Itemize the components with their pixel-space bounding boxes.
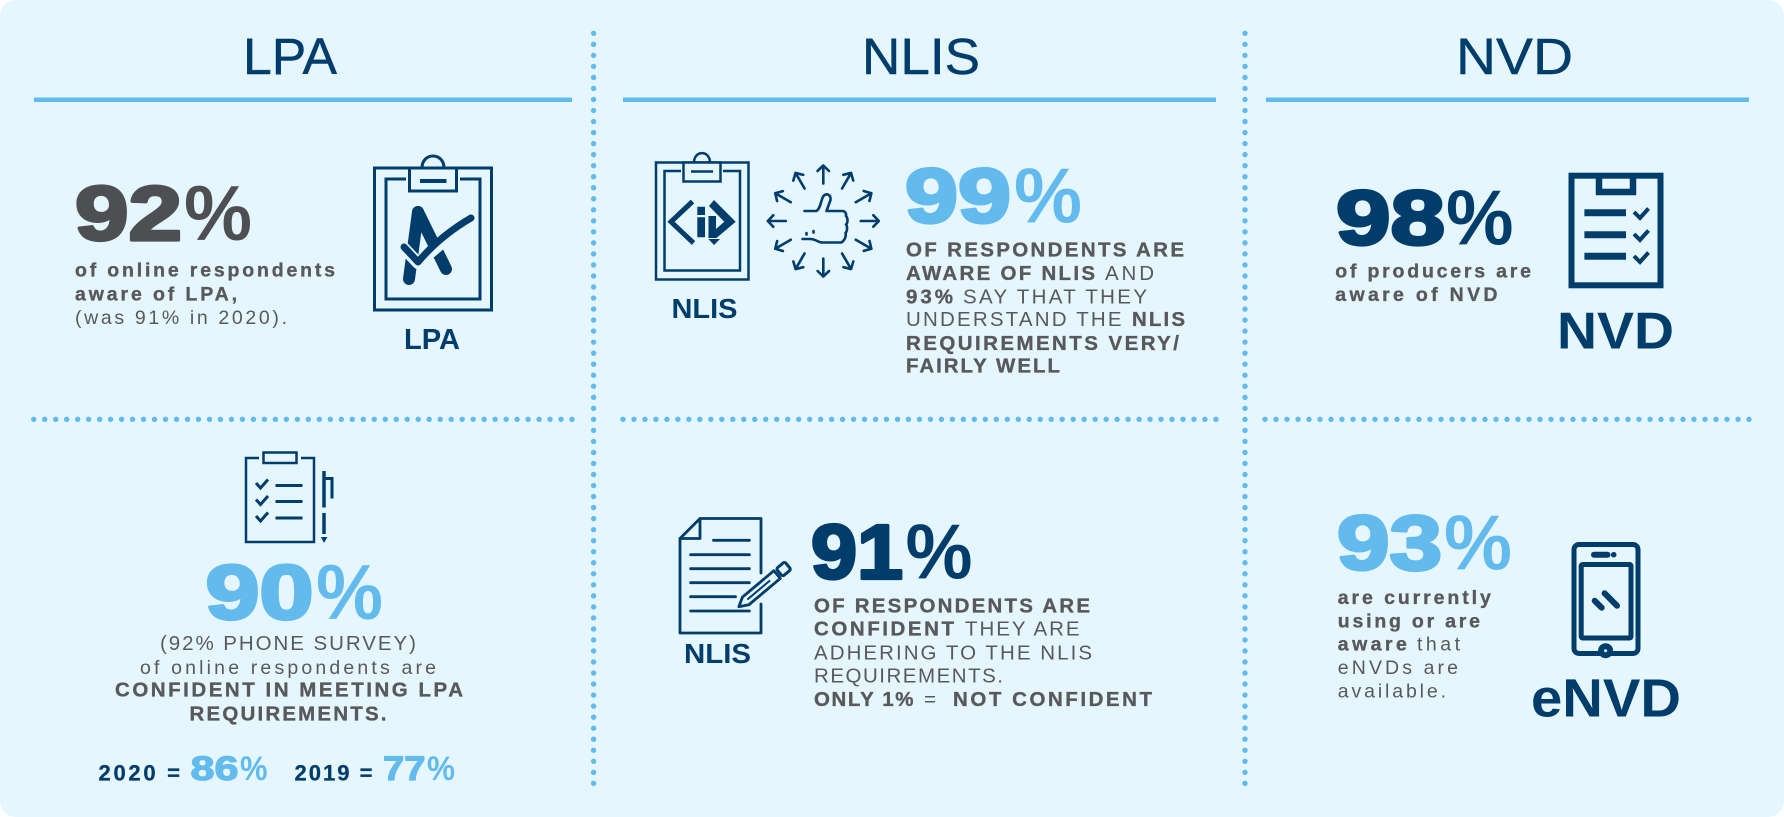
stat: 92%: 92 (75, 171, 182, 257)
panel: NVD column (1266, 28, 1749, 729)
text block: awareness and understanding of NLIS: AWARE OF NLIS (906, 262, 1095, 285)
comparison: 2020 equals 86%: 86 (190, 750, 238, 788)
icon: thumbs up with radiating arrows (768, 166, 879, 276)
icon label: LPA: LPA (404, 324, 460, 356)
text block: awareness and understanding of NLIS: OF RESPONDENTS ARE (906, 239, 1184, 262)
text block: confidence in meeting LPA requirements: (92% PHONE SURVEY) (160, 632, 416, 655)
icon: NLIS clipboard with ID mark (656, 153, 748, 280)
icon label: NLIS document: NLIS (684, 638, 751, 669)
text block: awareness and understanding of NLIS (906, 239, 1185, 378)
text block: confidence in meeting LPA requirements: CONFIDENT IN MEETING LPA (115, 679, 463, 702)
text block: producers aware of NVD: of producers are (1335, 261, 1531, 283)
comparison: 2020 equals 86%: 2020 = (98, 761, 180, 786)
icon label: NLIS: NLIS (672, 293, 738, 324)
comparison: 2019 equals 77%: % (427, 750, 455, 788)
text block: awareness of LPA: (was 91% in 2020). (75, 307, 287, 329)
icon label: eNVD: eNVD (1531, 669, 1681, 729)
heading: NVD: NVD (1456, 28, 1573, 85)
stat: 99%: % (1014, 152, 1082, 240)
text block: producers aware of NVD: aware of NVD (1335, 284, 1498, 306)
text block: awareness and understanding of NLIS: NLIS (1132, 308, 1185, 331)
stat: 93%: % (1444, 498, 1512, 586)
stat: 92%: % (184, 169, 252, 257)
stat: 98%: 98 (1336, 176, 1445, 262)
text block: confidence in meeting LPA requirements (115, 632, 463, 726)
text block: awareness and understanding of NLIS: AND (1105, 262, 1154, 285)
stat: 90%: 90 (206, 550, 314, 636)
text block: confidence adhering to NLIS (814, 594, 1152, 711)
text block: confidence adhering to NLIS: CONFIDENT (814, 618, 954, 641)
text block: awareness and understanding of NLIS: SAY THAT THEY (963, 285, 1147, 308)
text block: eNVD awareness: that (1417, 634, 1461, 656)
text block: eNVD awareness: are currently (1338, 587, 1491, 609)
text block: confidence adhering to NLIS: ONLY 1% (814, 688, 914, 711)
text block: producers aware of NVD (1335, 261, 1531, 306)
panel: NLIS column (623, 28, 1216, 711)
text block: confidence adhering to NLIS: THEY ARE (965, 618, 1080, 641)
text block: awareness and understanding of NLIS: UNDERSTAND THE (906, 308, 1122, 331)
comparison: 2019 equals 77%: 77 (383, 750, 426, 788)
heading rule: LPA (34, 98, 572, 102)
text block: eNVD awareness: using or are (1338, 610, 1480, 632)
stat: 91%: 91 (811, 510, 903, 596)
text block: confidence adhering to NLIS: NOT CONFIDENT (953, 688, 1152, 711)
stat: 91%: % (906, 508, 972, 596)
heading: LPA: LPA (243, 28, 337, 85)
text block: confidence adhering to NLIS: = (924, 688, 936, 711)
text block: confidence adhering to NLIS: ADHERING TO THE NLIS (814, 641, 1092, 664)
stat: 93%: 93 (1337, 500, 1442, 586)
stat: 99%: 99 (905, 154, 1011, 240)
text block: eNVD awareness: eNVDs are (1338, 657, 1458, 679)
stat: 90%: % (316, 548, 383, 636)
comparison: 2020 equals 86% (98, 750, 268, 788)
text block: confidence adhering to NLIS: OF RESPONDENTS ARE (814, 594, 1090, 617)
panel: LPA column (34, 28, 572, 788)
heading: NLIS: NLIS (862, 28, 980, 85)
text block: eNVD awareness: aware (1338, 634, 1407, 656)
comparison: 2019 equals 77%: 2019 = (294, 761, 372, 786)
heading rule: NLIS (623, 98, 1216, 102)
icon: smartphone (1574, 544, 1638, 658)
text block: eNVD awareness (1338, 587, 1491, 702)
text block: awareness of LPA: aware of LPA, (75, 284, 237, 306)
text block: awareness and understanding of NLIS: REQUIREMENTS VERY/ (906, 332, 1179, 355)
text block: awareness and understanding of NLIS: FAIRLY WELL (906, 355, 1060, 378)
icon label: NVD: NVD (1557, 302, 1674, 360)
stat: 98%: % (1446, 174, 1514, 262)
text block: eNVD awareness: available. (1338, 680, 1446, 702)
text block: awareness of LPA (75, 260, 335, 329)
icon: NVD checklist (1572, 176, 1660, 285)
text block: confidence in meeting LPA requirements: REQUIREMENTS. (190, 703, 386, 726)
comparison: 2020 equals 86%: % (240, 750, 268, 788)
icon: document and pen (680, 518, 791, 633)
text block: confidence in meeting LPA requirements: of online respondents are (140, 657, 436, 679)
icon: checklist and pen (246, 452, 332, 543)
heading rule: NVD (1266, 98, 1749, 102)
icon: LPA clipboard (374, 156, 492, 310)
text block: awareness and understanding of NLIS: 93% (906, 285, 953, 308)
text block: awareness of LPA: of online respondents (75, 260, 335, 282)
comparison: 2019 equals 77% (294, 750, 455, 788)
text block: confidence adhering to NLIS: REQUIREMENTS. (814, 665, 1003, 688)
